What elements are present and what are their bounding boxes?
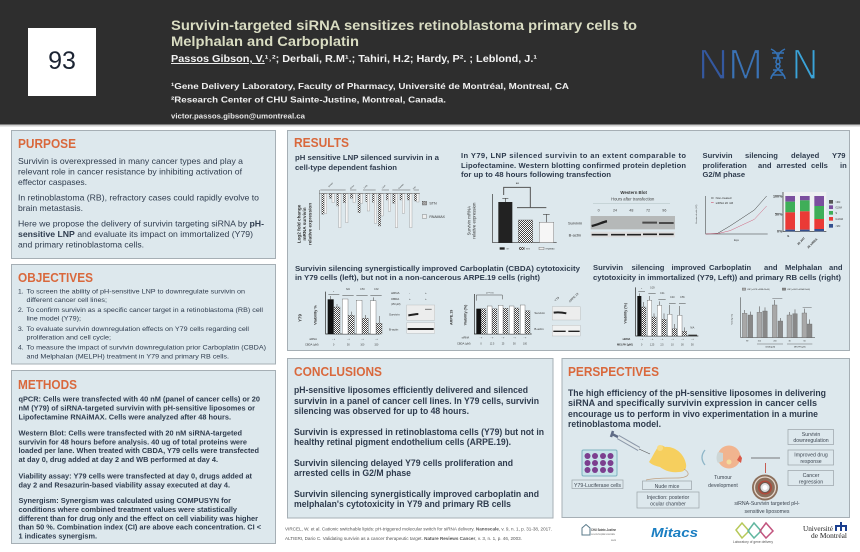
chart: viability with melphalan: 30 xyxy=(681,345,684,347)
chart: viability with melphalan: - + xyxy=(651,339,654,341)
chart: Y79 viability with carboplatin: Viability % xyxy=(313,305,318,325)
chart: cell cycle stacked bars: G1/G0 xyxy=(835,217,844,221)
chart: ARPE.19 viability with carboplatin: 50 xyxy=(513,344,516,346)
chart: primary RB cell viability: 200 xyxy=(773,340,778,342)
finding 3 heading: delayed xyxy=(791,151,820,160)
methods text: qPCR: Cells were transfected with 40 nM (panel of cancer cells) or 20 xyxy=(18,397,260,404)
chart: log2 fold change by cell line: Log2 fold change xyxy=(296,204,301,243)
outcome: survivin downregulation: downregulation xyxy=(793,438,829,444)
western blot: Y79: - xyxy=(409,291,410,295)
western blot: 0 xyxy=(598,209,600,213)
chart: ARPE.19 viability with carboplatin: siRNA xyxy=(462,336,469,340)
chart: Y79 viability with carboplatin: 0 xyxy=(333,344,335,346)
icon: cell culture plate xyxy=(582,450,617,476)
affiliations: ²Research Center of CHU Sainte-Justine, Montreal, Canada. xyxy=(171,94,446,104)
logo: Université de Montréal: de Montréal xyxy=(811,531,847,540)
finding 5 heading: Carboplatin xyxy=(709,263,752,272)
title xyxy=(171,18,637,49)
label: injection site: Injection: posterior xyxy=(647,495,689,501)
chart: Y79 viability with carboplatin: 150 xyxy=(374,344,379,346)
conclusions text: Survivin silencing synergistically improved carboplatin and xyxy=(294,489,539,499)
chart: proliferation curve: Number of cells (10⁵) xyxy=(695,204,698,223)
chart: ARPE.19 viability with carboplatin: 100 xyxy=(523,344,528,346)
chart: ARPE.19 viability with carboplatin: 25 xyxy=(502,344,505,346)
chart: primary RB cell viability xyxy=(731,288,815,348)
purpose text: and primary retinoblastoma cells. xyxy=(18,241,144,250)
methods text: day 2 and Resazurin-based viability assay executed at day 4. xyxy=(18,483,230,490)
heading: methods: METHODS xyxy=(18,377,77,392)
finding 4 heading: in Y79 cells (left), but not in a non-cancerous ARPE.19 cells (right) xyxy=(295,273,540,282)
panel: objectives xyxy=(12,264,276,364)
western blot: Y79: siRNA xyxy=(391,291,399,295)
finding 3 heading: in xyxy=(840,161,847,170)
logo: NMIN xyxy=(698,41,818,89)
chart: ARPE.19 viability with carboplatin: ARPE.19 xyxy=(450,310,454,325)
objectives list: 4. xyxy=(18,345,24,352)
poster number box xyxy=(28,28,96,96)
chart: viability with melphalan: N/A xyxy=(690,326,695,329)
panel: results xyxy=(288,130,850,350)
chart: proliferation curve: siRNA 20 nM xyxy=(716,201,734,205)
purpose text xyxy=(18,157,264,250)
logo: Université de Montréal: Université xyxy=(803,524,834,533)
finding 1 heading: cell-type dependent fashion xyxy=(295,163,397,172)
label: cells: Y79-Luciferase cells xyxy=(574,483,621,489)
heading: perspectives: PERSPECTIVES xyxy=(568,364,659,379)
chart: proliferation curve: Non-treated xyxy=(716,196,732,200)
outcome: cancer regression xyxy=(788,470,834,486)
methods text: at day 0, drug added at day 2 and WB performed at day 4. xyxy=(18,457,218,464)
references: ALTIERI, Dario C. Validating survivin as a cancer therapeutic target. Nature Reviews Cancer, v. 3, n. 1, p. 46, 2003. xyxy=(285,536,522,541)
methods text: conditions where combined treatment values were statistically xyxy=(18,507,237,514)
finding 5 heading: improved xyxy=(672,263,706,272)
chart: viability with melphalan: 0.41 xyxy=(660,293,665,295)
chart: primary RB cell viability: LNP (siSTB siRNA 20nM) xyxy=(747,288,770,291)
label: injection site: ocular chamber xyxy=(650,502,686,508)
conclusions text: Survivin is expressed in retinoblastoma cells (Y79) but not in xyxy=(294,427,544,437)
heading: objectives: OBJECTIVES xyxy=(18,270,93,285)
chart: cell cycle stacked bars: >4N xyxy=(835,200,840,204)
finding 1 heading: pH sensitive LNP silenced survivin in a xyxy=(295,153,440,162)
chart: viability with melphalan: - + xyxy=(640,339,644,341)
chart: log2 fold change by cell line: Liver xyxy=(381,184,387,189)
chart: cell cycle stacked bars: 100% xyxy=(773,195,783,199)
icon: mouse xyxy=(646,445,688,480)
chart: log2 fold change by cell line: Breast xyxy=(328,182,334,188)
methods text: Lipofectamine RNAiMAX. Cells were analyzed after 48 hours. xyxy=(18,415,231,422)
western blot: Y79: + xyxy=(409,297,411,301)
finding 4 heading xyxy=(295,264,581,282)
western blot: Y79 versus ARPE.19: Y79 xyxy=(554,296,560,302)
methods text: Viability assay: Y79 cells were transfected at day 0, drugs added at xyxy=(18,474,253,481)
finding 2 heading: Lipofectamine. Western blotting confirmed protein depletion xyxy=(461,161,686,170)
conclusions text xyxy=(294,385,544,509)
chart: Y79 viability with carboplatin: - + xyxy=(332,339,336,341)
label: liposomes: sensitive liposomes xyxy=(745,509,790,515)
finding 3 heading: Survivin xyxy=(702,151,733,160)
objectives list: line model (Y79); xyxy=(26,316,81,323)
chart: cell cycle stacked bars: G2/M xyxy=(835,205,842,209)
western blot xyxy=(568,190,675,238)
objectives list: proliferation and cell cycle; xyxy=(26,335,111,342)
objectives list: 2. xyxy=(18,307,24,314)
chart: ARPE.19 viability with carboplatin: 0 xyxy=(480,344,482,346)
objectives list: different cancer cell lines; xyxy=(26,297,107,304)
finding 2 heading: In Y79, LNP silenced survivin to an extent comparable to xyxy=(461,151,686,160)
western blot: Y79 versus ARPE.19 xyxy=(534,292,580,336)
chart: survivin mRNA bars: ** xyxy=(516,182,519,186)
chart: ARPE.19 viability with carboplatin: - + xyxy=(491,338,494,340)
heading: results: RESULTS xyxy=(294,135,349,150)
chart: ARPE.19 viability with carboplatin: p = n.s xyxy=(486,292,494,294)
logo: CHU Sainte-Justine: CHU Sainte-Justine xyxy=(591,528,616,532)
chart: primary RB cell viability: LNP (siSUR siRNA 20nM) xyxy=(787,288,810,291)
perspectives text xyxy=(568,388,826,429)
perspectives text: The high efficiency of the pH-sensitive liposomes in delivering xyxy=(568,388,826,398)
objectives list: To measure the impact of survivin downregulation prior Carboplatin (CBDA) xyxy=(26,345,266,352)
western blot: Western Blot xyxy=(620,190,648,195)
chart: primary RB cell viability: CBDA [µM] xyxy=(765,345,775,348)
methods text: loaded per lane. When treated with CBDA, Y79 cells were transfected xyxy=(18,448,259,455)
chart: survivin mRNA bars: STN xyxy=(526,249,531,251)
purpose text: Survivin is overexpressed in many cancer types and play a xyxy=(18,157,243,166)
diagram: in vivo experiment xyxy=(572,430,834,515)
objectives list xyxy=(18,289,266,360)
chart: cell cycle stacked bars xyxy=(773,192,844,249)
logo: Laboratory of gene delivery: Laboratory of gene delivery xyxy=(733,540,773,544)
chart: log2 fold change by cell line: Eye xyxy=(413,186,417,190)
chart: viability with melphalan: siRNA xyxy=(622,337,630,341)
chart: ARPE.19 viability with carboplatin: Viability (%) xyxy=(464,304,468,325)
chart: log2 fold change by cell line xyxy=(296,182,446,245)
chart: viability with melphalan: 50 xyxy=(691,345,694,347)
finding 2 heading xyxy=(461,151,686,179)
chart: viability with melphalan: 10 xyxy=(671,345,674,347)
title: Survivin-targeted siRNA sensitizes retinoblastoma primary cells to xyxy=(171,18,637,33)
chart: log2 fold change by cell line: relative expression xyxy=(308,203,313,245)
text: mère-enfant xyxy=(611,538,616,542)
authors: Passos Gibson, V. ¹˒²; Derbali, R.M¹.; Tahiri, H.2; Hardy, P². ; Leblond, J.¹ xyxy=(171,54,537,65)
heading: purpose: PURPOSE xyxy=(18,136,76,151)
chart: primary RB cell viability: 60 xyxy=(804,340,807,342)
chart: viability with melphalan: - + xyxy=(671,339,674,341)
chart: primary RB cell viability: MELPH [µM] xyxy=(794,346,806,348)
chart: Y79 viability with carboplatin: 0.53 xyxy=(360,289,365,291)
chart: survivin mRNA bars: RNAiMAX xyxy=(546,248,555,251)
chart: primary RB cell viability: NT xyxy=(746,340,749,342)
chart: ARPE.19 viability with carboplatin: CBDA (µM) xyxy=(457,342,471,346)
methods text: 1 indicates synergism. xyxy=(18,533,97,540)
heading: conclusions: CONCLUSIONS xyxy=(294,364,382,379)
finding 5 heading: and xyxy=(829,263,843,272)
icon: syringe xyxy=(611,431,650,454)
label: tumour development xyxy=(708,475,738,489)
western blot: 96 xyxy=(662,209,666,213)
arrow: treatment leads to outcomes xyxy=(751,457,780,459)
chart: viability with melphalan: - + xyxy=(681,339,684,341)
chart: Y79 viability with carboplatin: Y79 xyxy=(298,314,303,322)
outcome: survivin downregulation xyxy=(788,430,834,444)
chart: viability with melphalan: Viability (%) xyxy=(624,302,628,324)
chart: viability with melphalan xyxy=(617,287,698,347)
purpose text: brain metastasis. xyxy=(18,204,83,213)
western blot: 72 xyxy=(646,209,650,213)
methods text: nM (Y79) of siRNA-targeted survivin with pH-sensitive liposomes or xyxy=(18,406,255,413)
chart: survivin mRNA bars: NT xyxy=(507,249,510,251)
title: Melphalan and Carboplatin xyxy=(171,34,359,49)
chart: viability with melphalan: * xyxy=(641,289,642,291)
chart: ARPE.19 viability with carboplatin: 12.5 xyxy=(490,344,495,346)
chart: survivin mRNA bars: Survivin mRNA xyxy=(466,206,471,235)
western blot: Y79 versus ARPE.19: ARPE.19 xyxy=(568,292,580,303)
western blot: 48 xyxy=(629,209,633,213)
methods text xyxy=(18,397,261,540)
references: VIRCEL, W. et al. Cationic switchable lipids: pH-triggered molecular switch for siRNA delivery. Nanoscale, v. 9, n. 1, p. 31-38, 2017. xyxy=(285,527,552,532)
logo: NMIN: N xyxy=(792,41,818,89)
chart: Y79 viability with carboplatin: siRNA xyxy=(309,337,317,341)
chart: Y79 viability with carboplatin: 50 xyxy=(347,344,350,346)
outcome: survivin downregulation: Survivin xyxy=(802,432,820,438)
finding 3 heading xyxy=(702,151,847,179)
chart: cell cycle stacked bars: <2N xyxy=(835,224,840,228)
chart: primary RB cell viability: 30 xyxy=(789,340,792,342)
chart: viability with melphalan: 0.29 xyxy=(650,287,655,289)
contact email: victor.passos.gibson@umontreal.ca xyxy=(171,112,306,120)
purpose text: relevant role in cancer resistance by inhibiting activation of xyxy=(18,168,243,176)
header band xyxy=(0,0,860,126)
objectives list: and Melphalan (MELPH) treatment in Y79 and primary RB cells. xyxy=(26,353,229,360)
finding 5 heading xyxy=(593,263,843,282)
western blot: Y79: + xyxy=(425,297,427,301)
chart: ARPE.19 viability with carboplatin: - + xyxy=(513,338,516,340)
methods text: than 50 %. Combination index (CI) are above each concentration. CI < xyxy=(18,525,261,532)
logo: Laboratory of gene delivery xyxy=(733,523,773,544)
chart: log2 fold change by cell line: mRNA survivin xyxy=(302,207,307,241)
chart: ARPE.19 viability with carboplatin: - + xyxy=(480,338,483,340)
poster number box: 93 xyxy=(48,47,76,75)
western blot: Survivin xyxy=(568,221,582,226)
label: liposomes xyxy=(734,501,800,515)
chart: primary RB cell viability: Viability (%) xyxy=(731,314,734,325)
label: liposomes: siRNA-Survivin targeted pH- xyxy=(734,501,800,507)
chart: cell cycle stacked bars: 50% xyxy=(775,213,783,217)
chart: Y79 viability with carboplatin: - + xyxy=(375,339,378,341)
finding 3 heading: G2/M phase xyxy=(702,170,745,179)
panel: methods xyxy=(12,370,276,544)
methods text: different than for drug only and the effect on cell viability was higher xyxy=(18,516,258,523)
chart: survivin mRNA bars xyxy=(466,182,557,251)
label: tumour development: development xyxy=(708,483,738,489)
conclusions text: arrested cells in G2/M phase xyxy=(294,468,411,478)
conclusions text: Survivin silencing delayed Y79 cells proliferation and xyxy=(294,458,513,468)
western blot: Y79: Survivin xyxy=(389,313,400,317)
logo: CHU Sainte-Justine xyxy=(582,524,616,542)
objectives list: 3. xyxy=(18,326,24,333)
chart: viability with melphalan: 0.40 xyxy=(670,297,675,299)
outcome: improved drug response: response xyxy=(800,459,822,465)
finding 5 heading: Melphalan xyxy=(785,263,822,272)
chart: viability with melphalan: 0 xyxy=(641,345,643,347)
western blot: Y79 versus ARPE.19: B-actin xyxy=(534,327,544,331)
finding 4 heading: Survivin silencing synergistically improved Carboplatin (CBDA) cytotoxicity xyxy=(295,264,581,273)
finding 1 heading xyxy=(295,153,440,172)
chart: cell cycle stacked bars: 0% xyxy=(777,230,783,234)
finding 2 heading: for up to 48 hours following transfection xyxy=(461,170,611,179)
finding 3 heading: cells xyxy=(811,161,828,170)
western blot: 24 xyxy=(613,209,617,213)
purpose text: effector caspases. xyxy=(18,178,87,187)
finding 5 heading: and xyxy=(764,263,778,272)
label: nude mice xyxy=(642,481,692,490)
label: injection site xyxy=(637,492,699,508)
chart: ARPE.19 viability with carboplatin xyxy=(450,292,532,346)
logo: CHU Sainte-Justine: Le centre hospitalier universitaire xyxy=(591,533,615,536)
chart: proliferation curve xyxy=(695,196,768,242)
chart: Y79 viability with carboplatin: CBDA (µM) xyxy=(305,342,319,346)
panel: purpose xyxy=(12,130,276,258)
finding 5 heading: Survivin xyxy=(593,263,623,272)
chart: cell cycle stacked bars: 36 siRNA xyxy=(806,237,819,249)
icon: eye with tumour xyxy=(702,446,742,468)
chart: Y79 viability with carboplatin: * xyxy=(333,292,334,294)
outcome: improved drug response: Improved drug xyxy=(794,452,828,458)
icon: liposome xyxy=(752,474,778,500)
chart: ARPE.19 viability with carboplatin: - + xyxy=(524,338,527,340)
western blot: Y79: CBDA xyxy=(391,297,399,301)
panel: conclusions xyxy=(288,358,553,518)
finding 3 heading: silencing xyxy=(745,151,778,160)
methods text: survivin for 48 hours before analysis. 40 ug of total proteins were xyxy=(18,439,247,446)
perspectives text: encourage us to perform in vivo experimentation in a murine xyxy=(568,409,818,419)
chart: Y79 viability with carboplatin xyxy=(298,288,382,346)
logo: Mitacs: Mitacs xyxy=(651,526,698,540)
objectives list: To evaluate survivin downregulation effects on Y79 cells regarding cell xyxy=(26,326,250,333)
references xyxy=(285,527,552,541)
finding 3 heading: arrested xyxy=(776,161,807,170)
purpose text: In retinoblastoma (RB), refractory cases could rapidly evolve to xyxy=(18,194,259,203)
conclusions text: pH-sensitive liposomes efficiently delivered and silenced xyxy=(294,385,528,395)
affiliations xyxy=(171,81,569,104)
outcome: improved drug response xyxy=(788,450,834,465)
chart: log2 fold change by cell line: Ovarian xyxy=(398,183,405,190)
finding 5 heading: cytotoxicity in immortalized (Y79, Left)) and primary RB cells (right) xyxy=(593,273,841,282)
chart: Y79 viability with carboplatin: 100 xyxy=(360,344,365,346)
chart: viability with melphalan: 2,5 xyxy=(660,345,664,347)
arrow: liposomes to treatment xyxy=(764,463,766,473)
chart: viability with melphalan: MELPH [µM] xyxy=(617,343,633,347)
chart: log2 fold change by cell line: STN xyxy=(429,202,437,206)
western blot: Y79 xyxy=(389,291,435,333)
chart: survivin mRNA bars: relative expression xyxy=(471,202,476,239)
chart: primary RB cell viability: 100 xyxy=(758,340,762,342)
chart: Y79 viability with carboplatin: 0.32 xyxy=(374,289,379,291)
conclusions text: silencing was observed for up to 48 hours. xyxy=(294,406,469,416)
purpose text: sensitive LNP and evaluate its impact on immortalized (Y79) xyxy=(18,230,253,239)
outcome: cancer regression: regression xyxy=(799,480,823,486)
chart: cell cycle stacked bars: 36 JHT xyxy=(796,236,806,246)
methods text: Synergism: Synergism was calculated using COMPUSYN for xyxy=(18,498,231,505)
western blot: Y79: (150 µM) xyxy=(391,304,401,306)
objectives list: To screen the ability of pH-sensitive LNP to downregulate survivin on xyxy=(26,289,245,296)
chart: viability with melphalan: 1,25 xyxy=(650,345,655,347)
logo: Université de Montréal xyxy=(803,522,847,540)
perspectives text: siRNA and specifically survivin expression in cancer cells xyxy=(568,398,817,408)
finding 5 heading: silencing xyxy=(632,263,665,272)
chart: Y79 viability with carboplatin: - + xyxy=(361,339,364,341)
western blot: Y79: B-actin xyxy=(389,328,399,332)
purpose text: Here we propose the delivery of survivin targeting siRNA by pH- xyxy=(18,220,264,229)
chart: log2 fold change by cell line: Colon xyxy=(350,185,355,190)
chart: viability with melphalan: - + xyxy=(691,339,694,341)
objectives list: To confirm survivin as a specific cancer target in a retinoblastoma (RB) cell xyxy=(26,307,264,314)
label: cells xyxy=(572,480,623,489)
chart: log2 fold change by cell line: Lung xyxy=(364,185,368,189)
chart: Y79 viability with carboplatin: N/A xyxy=(346,288,350,291)
western blot: Y79 versus ARPE.19: Survivin xyxy=(534,311,545,315)
chart: viability with melphalan: 0.56 xyxy=(680,297,685,299)
logo: NMIN: NM xyxy=(698,41,763,89)
chart: viability with melphalan: - + xyxy=(661,339,664,341)
chart: cell cycle stacked bars: 0 xyxy=(786,234,790,238)
chart: log2 fold change by cell line: RNAiMAX xyxy=(429,215,446,219)
methods text: Western Blot: Cells were transfected with 20 nM siRNA-targeted xyxy=(18,430,242,437)
label: nude mice: Nude mice xyxy=(655,484,680,490)
outcome: cancer regression: Cancer xyxy=(803,473,820,479)
affiliations: ¹Gene Delivery Laboratory, Faculty of Pharmacy, Université de Montréal, Montreal, CA xyxy=(171,81,569,91)
western blot: B-actin xyxy=(569,233,581,238)
panel: perspectives xyxy=(562,358,850,518)
objectives list: 1. xyxy=(18,289,24,296)
conclusions text: melphalan's cytotoxicity in Y79 and primary RB cells xyxy=(294,499,511,509)
finding 3 heading: proliferation xyxy=(702,161,747,170)
chart: proliferation curve: days xyxy=(734,240,740,242)
finding 3 heading: Y79 xyxy=(832,151,846,160)
chart: ARPE.19 viability with carboplatin: - + xyxy=(502,338,505,340)
chart: cell cycle stacked bars: S xyxy=(835,211,837,215)
western blot: Y79: + xyxy=(425,291,427,295)
label: tumour development: Tumour xyxy=(714,475,732,481)
chart: Y79 viability with carboplatin: - + xyxy=(347,339,350,341)
conclusions text: survivin in a panel of cancer cell lines. In Y79 cells, survivin xyxy=(294,396,539,406)
western blot: Hours after transfection xyxy=(611,197,655,202)
conclusions text: healthy retinal pigment endothelium cells (ARPE.19). xyxy=(294,437,511,447)
perspectives text: retinoblastoma model. xyxy=(568,419,661,429)
finding 3 heading: and xyxy=(758,161,772,170)
